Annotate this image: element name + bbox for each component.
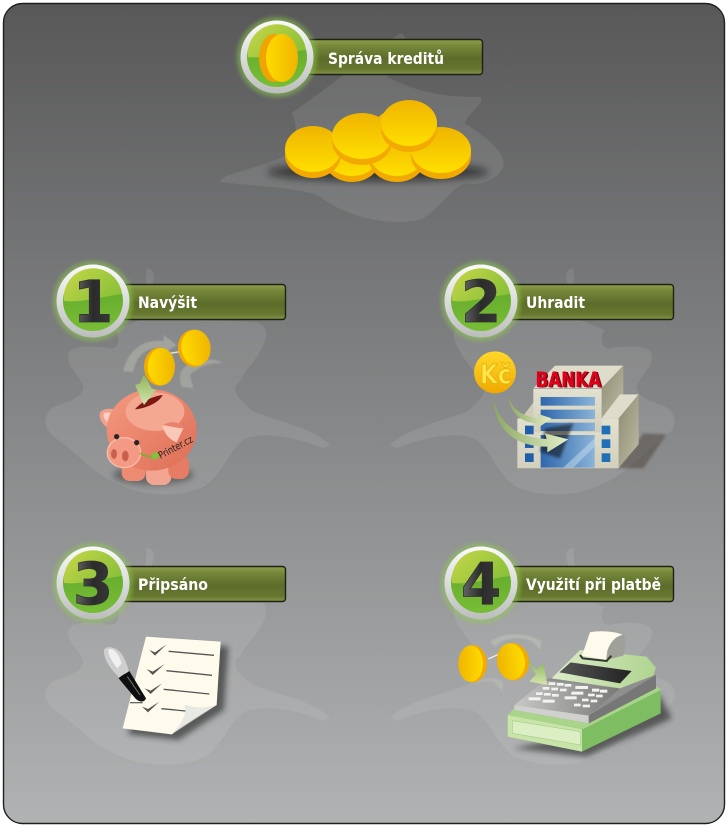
logo: Printer.cz: Printer.cz xyxy=(157,434,195,462)
heading bar: Uhradit xyxy=(526,293,585,312)
receipt xyxy=(582,631,623,660)
heading bar: Připsáno xyxy=(138,575,208,594)
icon: bank building with Kč coin xyxy=(474,351,667,468)
number badge 2: 2 xyxy=(461,268,501,336)
heading bar xyxy=(112,284,286,320)
sign: BANKA: BANKA xyxy=(537,369,603,394)
heading bar: Správa kreditů xyxy=(328,49,444,68)
icon: checklist and pen xyxy=(104,637,228,740)
number badge 3: 3 xyxy=(73,550,113,618)
number badge 1: 1 xyxy=(73,268,113,336)
number badge 3 xyxy=(53,543,133,623)
display housing xyxy=(552,650,656,688)
heading bar: Využití při platbě xyxy=(526,575,661,594)
heading bar xyxy=(500,284,674,320)
heading bar xyxy=(296,40,482,74)
heading bar: Navýšit xyxy=(138,293,197,312)
number badge 1 xyxy=(53,261,133,341)
icon: pile of gold coins xyxy=(268,100,488,182)
heading bar xyxy=(500,566,674,602)
step 2: Uhradit xyxy=(441,261,674,468)
ink splash backgrounds xyxy=(45,33,675,765)
number badge 4 xyxy=(441,543,521,623)
keyboard body xyxy=(514,675,656,723)
step 1: Navýšit xyxy=(53,261,286,485)
icon: coin badge xyxy=(237,17,317,97)
number badge 4: 4 xyxy=(461,550,501,618)
heading bar xyxy=(112,566,286,602)
step 4: Využití při platbě xyxy=(441,543,674,757)
step 3: Připsáno xyxy=(53,543,286,740)
icon: piggy bank with coins xyxy=(100,328,223,485)
number badge 2 xyxy=(441,261,521,341)
sign: BANKA: BANKA xyxy=(535,368,601,393)
section: Správa kreditů xyxy=(237,17,488,182)
base xyxy=(508,690,661,752)
icon: cash register with coins xyxy=(458,631,672,757)
icon: bank building with Kč coin: Kč xyxy=(480,359,511,390)
